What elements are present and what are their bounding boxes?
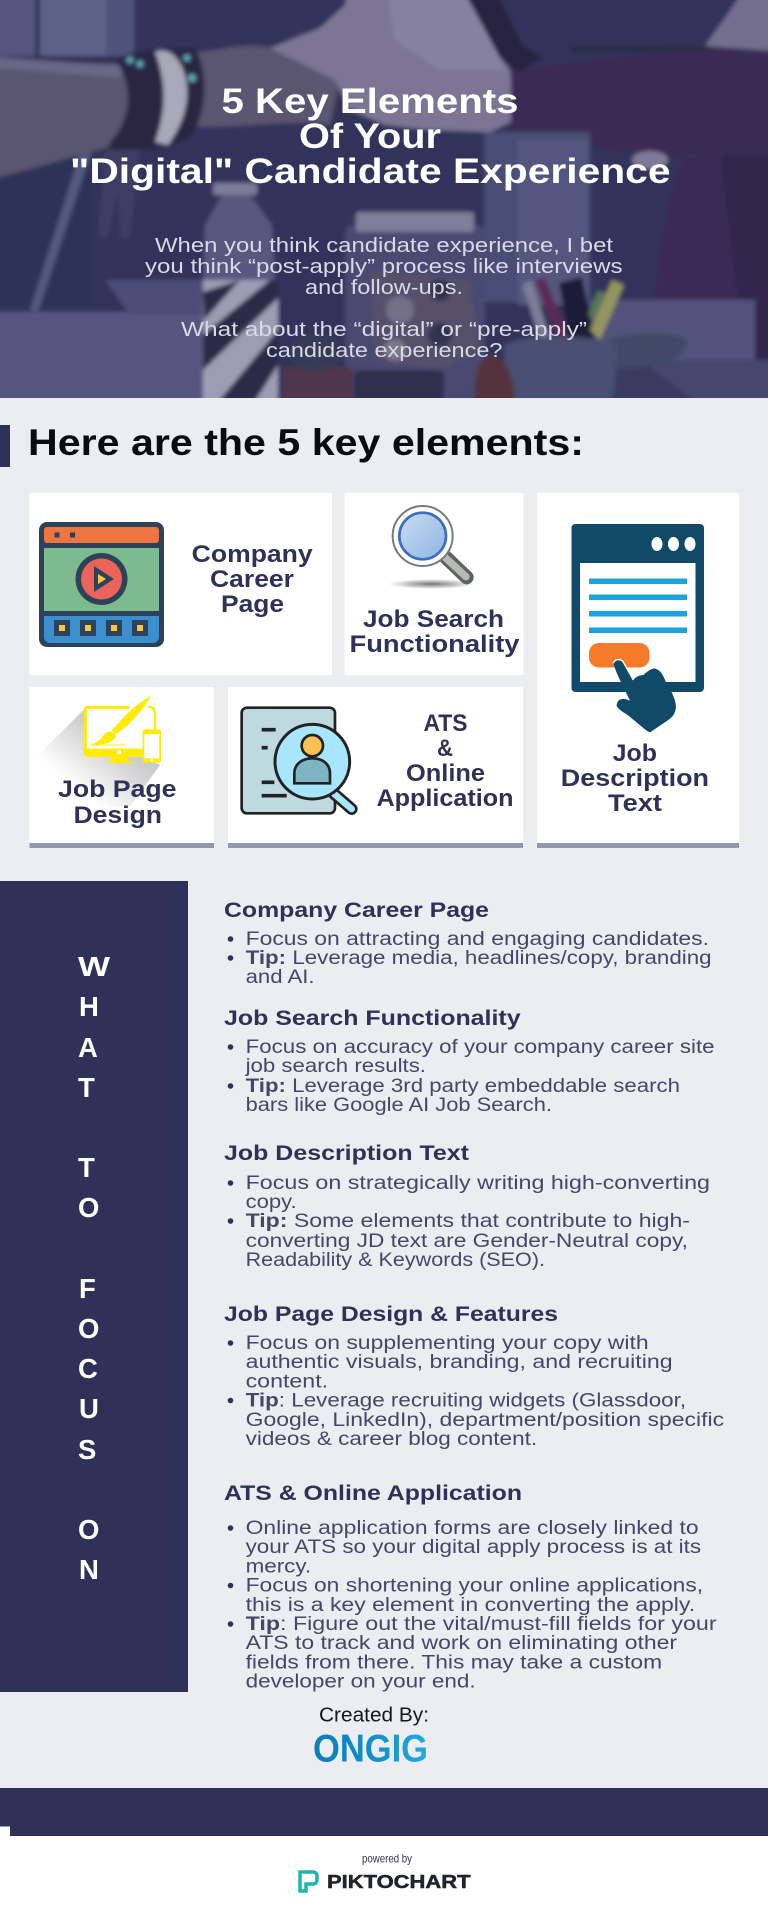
section: ATS & Online Application: your ATS so your digital apply process is at its [246, 1537, 701, 1558]
label: Job Search Functionality: Functionality [350, 631, 520, 658]
section: Company Career Page [224, 898, 712, 988]
section: ATS & Online Application: ATS to track and work on eliminating other [246, 1633, 678, 1654]
vertical heading: W [78, 951, 110, 982]
title [70, 81, 670, 191]
vertical heading: F [79, 1273, 96, 1304]
section: Job Search Functionality: Job Search Functionality [224, 1006, 521, 1030]
vertical heading: U [79, 1393, 99, 1424]
intro text: When you think candidate experience, I bet [155, 234, 613, 257]
section: ATS & Online Application: Tip : Figure out the vital/must-fill fields for your [246, 1614, 717, 1635]
footer area [0, 1826, 768, 1913]
section: Job Description Text: Job Description Text [224, 1141, 469, 1165]
vertical heading: C [78, 1353, 98, 1384]
card: Job Page Design [30, 687, 214, 848]
section: ATS & Online Application: fields from there. This may take a custom [246, 1652, 662, 1674]
vertical heading: O [78, 1313, 99, 1344]
panel: what to focus on [0, 881, 188, 1692]
hero photo: fist bump over a desk [0, 0, 768, 422]
icon: magnifying glass [388, 506, 475, 589]
label: Job Page Design [58, 776, 176, 829]
label: Job Page Design: Job Page [58, 776, 176, 803]
intro text [145, 234, 622, 362]
section: Job Description Text: copy. [246, 1192, 297, 1213]
label: Job Search Functionality: Job Search [363, 606, 504, 633]
vertical heading: T [78, 1152, 95, 1183]
section: Company Career Page: Focus on attracting and engaging candidates. [246, 929, 709, 950]
intro text: and follow-ups. [305, 276, 463, 299]
section: ATS & Online Application: ATS & Online Application [224, 1481, 522, 1505]
label: Company Career Page: Career [210, 566, 294, 593]
created by label: Created By: [319, 1704, 429, 1726]
vertical heading: N [79, 1554, 99, 1585]
section: Job Page Design & Features: Job Page Design & Features [224, 1302, 558, 1326]
label: ATS & Online Application: & [437, 735, 453, 762]
section: Job Search Functionality: Focus on accuracy of your company career site [246, 1037, 715, 1058]
label: ATS & Online Application [376, 710, 514, 812]
section: ATS & Online Application [224, 1481, 717, 1692]
logo: Ongig: ONGIG [313, 1728, 428, 1770]
section: Job Description Text: Readability & Keywords (SEO). [246, 1250, 545, 1271]
label: Job Description Text: Job [613, 740, 657, 767]
intro text: candidate experience? [266, 339, 502, 362]
section: Job Description Text [224, 1141, 710, 1271]
vertical heading: O [78, 1192, 99, 1223]
card: Job Search Functionality [344, 493, 524, 675]
section: ATS & Online Application: mercy. [246, 1556, 311, 1578]
title: 5 Key Elements [222, 81, 518, 121]
label: Job Description Text [561, 740, 709, 817]
label: Company Career Page [192, 541, 313, 618]
section: Company Career Page: Tip: Leverage media, headlines/copy, branding [246, 948, 712, 969]
vertical heading: O [78, 1514, 99, 1545]
section: Company Career Page: Company Career Page [224, 898, 489, 922]
icon: document with person under magnifier [242, 708, 352, 813]
section: ATS & Online Application: Online application forms are closely linked to [246, 1518, 699, 1539]
section: Job Search Functionality [224, 1006, 715, 1116]
title: "Digital" Candidate Experience [70, 151, 670, 191]
title: Of Your [299, 116, 441, 156]
label: Job Description Text: Text [608, 790, 662, 817]
label: Job Search Functionality [350, 606, 520, 658]
section: Job Page Design & Features [224, 1302, 724, 1450]
label: Job Description Text: Description [561, 765, 709, 792]
vertical heading: T [78, 1072, 95, 1103]
vertical heading [78, 951, 110, 1585]
card: Job Description Text [537, 493, 739, 848]
section: Job Page Design & Features: Focus on supplementing your copy with [246, 1333, 649, 1354]
label: Job Page Design: Design [74, 802, 162, 829]
vertical heading: H [79, 991, 99, 1022]
section: Job Page Design & Features: content. [246, 1372, 328, 1392]
icon: yellow devices with brush [35, 696, 161, 807]
section heading marker [0, 425, 10, 467]
section: ATS & Online Application: developer on your end. [246, 1672, 476, 1692]
footer band [0, 1788, 768, 1836]
label: Company Career Page: Company [192, 541, 313, 568]
label: ATS & Online Application: Online [406, 760, 485, 787]
label: ATS & Online Application: ATS [424, 710, 468, 737]
section: Job Page Design & Features: Google, LinkedIn), department/position specific [246, 1410, 724, 1431]
label: ATS & Online Application: Application [376, 785, 514, 812]
card: ATS & Online Application [228, 687, 523, 848]
intro text: you think “post-apply” process like interviews [145, 255, 622, 278]
card: Company Career Page [30, 493, 332, 675]
label: Company Career Page: Page [221, 591, 284, 618]
section: Job Page Design & Features: videos & career blog content. [246, 1429, 537, 1450]
section: Job Page Design & Features: authentic visuals, branding, and recruiting [246, 1352, 673, 1373]
section: ATS & Online Application: this is a key element in converting the apply. [246, 1595, 695, 1616]
section: Job Description Text: converting JD text are Gender-Neutral copy, [246, 1231, 688, 1252]
section: Company Career Page: and AI. [246, 967, 315, 988]
section: Job Description Text: Tip: Some elements that contribute to high- [246, 1211, 690, 1232]
intro text: What about the “digital” or “pre-apply” [181, 318, 587, 341]
section heading: Here are the 5 key elements: [28, 422, 584, 463]
icon: video page [39, 522, 164, 647]
section: Job Description Text: Focus on strategically writing high-converting [246, 1173, 710, 1194]
powered by label: powered by [362, 1852, 412, 1866]
section: Job Search Functionality: job search results. [244, 1056, 426, 1077]
section: Job Search Functionality: bars like Google AI Job Search. [246, 1095, 552, 1116]
section: Job Page Design & Features: Tip : Leverage recruiting widgets (Glassdoor, [246, 1390, 686, 1412]
vertical heading: S [78, 1434, 96, 1465]
icon: page with pointing hand [572, 524, 704, 732]
logo: Piktochart: PIKTOCHART [327, 1871, 471, 1892]
section: ATS & Online Application: Focus on shortening your online applications, [246, 1576, 703, 1596]
vertical heading: A [78, 1032, 98, 1063]
section: Job Search Functionality: Tip: Leverage 3rd party embeddable search [246, 1076, 680, 1097]
